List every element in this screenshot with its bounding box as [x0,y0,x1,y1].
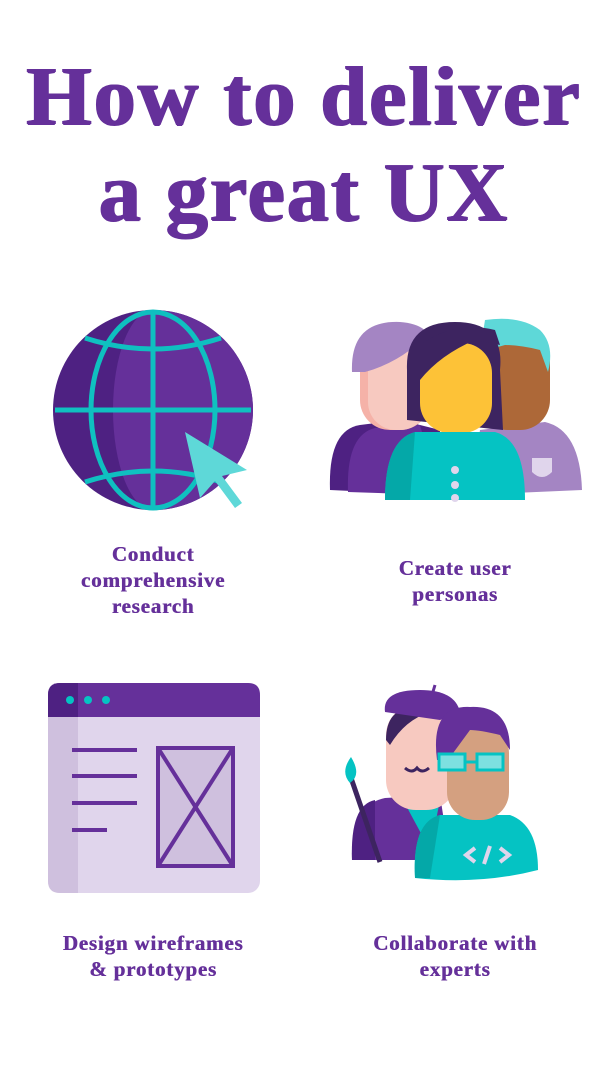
label: research: Conduct [112,542,194,566]
label: wireframes: & prototypes [89,957,217,981]
label: collaborate [373,931,537,981]
label: personas: personas [412,582,498,606]
label: personas [399,556,511,606]
title [26,50,582,240]
label: collaborate: Collaborate with [373,931,537,955]
label: research: comprehensive [81,568,225,592]
label: personas: Create user [399,556,511,580]
label: research: research [112,594,194,618]
icon: user personas [330,318,582,502]
label: collaborate: experts [420,957,490,981]
icon: collaborating experts [345,684,538,880]
icon: wireframe window [48,683,260,893]
label: research [81,542,225,618]
label: wireframes: Design wireframes [63,931,243,955]
label: wireframes [63,931,243,981]
title: How to deliver [26,50,582,143]
title: a great UX [99,146,509,239]
icon: globe with cursor [53,310,253,510]
